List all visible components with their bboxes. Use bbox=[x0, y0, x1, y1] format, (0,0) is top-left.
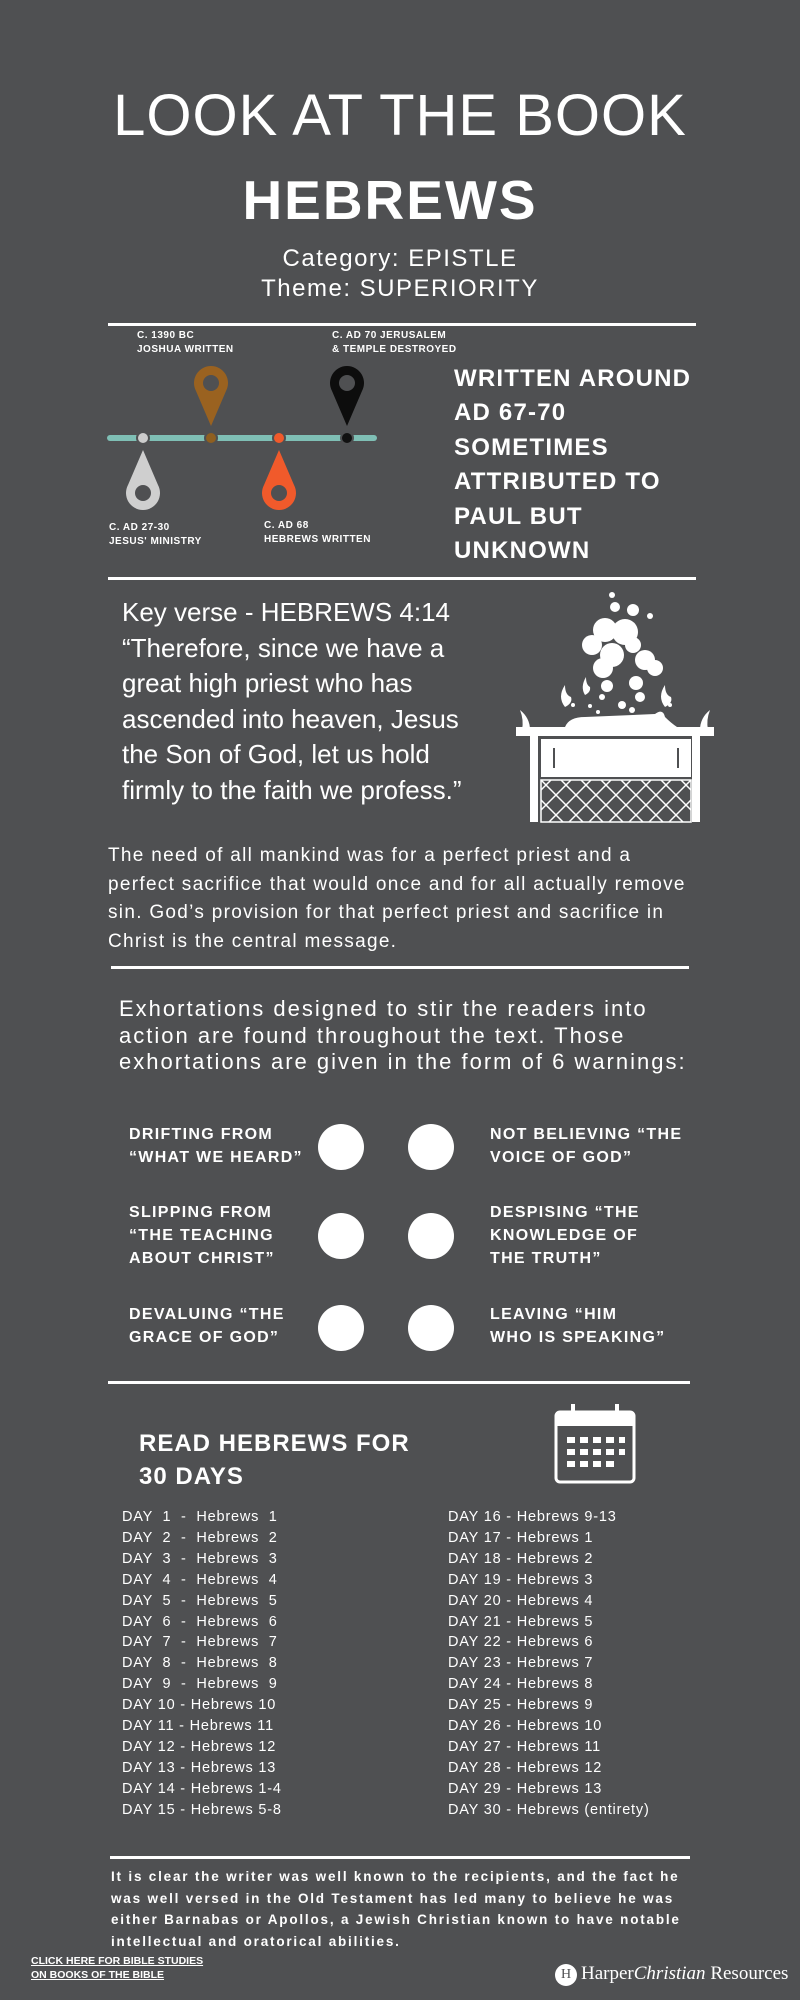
text: JESUS' MINISTRY bbox=[109, 536, 202, 547]
warning 2: VOICE OF GOD” bbox=[490, 1149, 632, 1166]
reading list days 1-15: DAY 13 - Hebrews 13 bbox=[122, 1760, 276, 1776]
key verse bbox=[122, 597, 462, 804]
warning 5 bbox=[129, 1306, 285, 1346]
key verse: ascended into heaven, Jesus bbox=[122, 704, 459, 734]
reading list days 1-15: DAY 6 - Hebrews 6 bbox=[122, 1614, 278, 1630]
reading list days 1-15: DAY 9 - Hebrews 9 bbox=[122, 1676, 278, 1692]
reading list days 16-30: DAY 29 - Hebrews 13 bbox=[448, 1781, 602, 1797]
reading list days 1-15: DAY 12 - Hebrews 12 bbox=[122, 1739, 276, 1755]
timeline labels bbox=[137, 330, 234, 355]
reading list days 1-15: DAY 2 - Hebrews 2 bbox=[122, 1530, 278, 1546]
category and theme: Category: EPISTLE bbox=[283, 245, 517, 272]
reading list days 1-15: DAY 3 - Hebrews 3 bbox=[122, 1551, 278, 1567]
key verse: “Therefore, since we have a bbox=[122, 632, 444, 662]
central message paragraph: perfect sacrifice that would once and for all actually remove bbox=[108, 874, 686, 894]
reading list days 16-30: DAY 16 - Hebrews 9-13 bbox=[448, 1509, 617, 1525]
pin: hebrews written bbox=[262, 450, 296, 510]
pin: jerusalem bbox=[330, 366, 364, 426]
reading list days 16-30: DAY 26 - Hebrews 10 bbox=[448, 1718, 602, 1734]
text: C. AD 68 bbox=[264, 520, 309, 531]
reading list days 16-30: DAY 28 - Hebrews 12 bbox=[448, 1760, 602, 1776]
authorship note bbox=[111, 1869, 681, 1949]
reading list days 1-15: DAY 1 - Hebrews 1 bbox=[122, 1509, 278, 1525]
logo: H bbox=[561, 1967, 571, 1982]
central message paragraph: Christ is the central message. bbox=[108, 930, 397, 952]
text: C. AD 70 JERUSALEM bbox=[332, 330, 446, 341]
warning 3: SLIPPING FROM bbox=[129, 1204, 272, 1221]
timeline labels: C. 1390 BC bbox=[137, 330, 194, 341]
reading list days 1-15: DAY 15 - Hebrews 5-8 bbox=[122, 1802, 282, 1818]
reading list days 1-15: DAY 11 - Hebrews 11 bbox=[122, 1718, 274, 1734]
reading list days 1-15: DAY 10 - Hebrews 10 bbox=[122, 1697, 276, 1713]
reading list days 16-30: DAY 22 - Hebrews 6 bbox=[448, 1634, 593, 1650]
warnings grid bbox=[129, 1124, 682, 1351]
key verse: Key verse - HEBREWS 4:14 bbox=[122, 597, 450, 627]
reading list days 16-30: DAY 27 - Hebrews 11 bbox=[448, 1739, 601, 1755]
icon: altar bbox=[516, 592, 714, 823]
reading list days 1-15: DAY 4 - Hebrews 4 bbox=[122, 1572, 278, 1588]
warning 3: ABOUT CHRIST” bbox=[129, 1250, 275, 1267]
authorship note: intellectual and oratorical abilities. bbox=[111, 1934, 401, 1949]
footer link: CLICK HERE FOR BIBLE STUDIES bbox=[31, 1955, 203, 1967]
reading list days 16-30: DAY 21 - Hebrews 5 bbox=[448, 1614, 593, 1630]
reading list days 1-15: DAY 14 - Hebrews 1-4 bbox=[122, 1781, 282, 1797]
category and theme: Theme: SUPERIORITY bbox=[261, 275, 539, 302]
reading plan heading: 30 DAYS bbox=[139, 1463, 244, 1490]
exhortations intro: exhortations are given in the form of 6 warnings: bbox=[119, 1049, 687, 1074]
text: & TEMPLE DESTROYED bbox=[332, 344, 457, 355]
footer link: ON BOOKS OF THE BIBLE bbox=[31, 1969, 164, 1981]
text: C. AD 27-30 bbox=[109, 522, 170, 533]
key verse: great high priest who has bbox=[122, 668, 413, 698]
exhortations intro: action are found throughout the text. Those bbox=[119, 1022, 625, 1048]
warning 3 bbox=[129, 1204, 275, 1267]
reading list days 16-30 bbox=[448, 1509, 650, 1818]
date summary: PAUL BUT bbox=[454, 503, 583, 530]
exhortations intro bbox=[119, 996, 687, 1074]
warning 4: KNOWLEDGE OF bbox=[490, 1227, 638, 1244]
text: HEBREWS WRITTEN bbox=[264, 534, 371, 545]
central message paragraph: The need of all mankind was for a perfect priest and a bbox=[108, 845, 631, 866]
category and theme bbox=[261, 245, 539, 302]
warning 1 bbox=[129, 1126, 303, 1166]
central message paragraph: sin. God’s provision for that perfect priest and sacrifice in bbox=[108, 902, 664, 923]
icon: calendar bbox=[554, 1404, 636, 1484]
reading list days 1-15: DAY 5 - Hebrews 5 bbox=[122, 1593, 278, 1609]
reading list days 16-30: DAY 20 - Hebrews 4 bbox=[448, 1593, 593, 1609]
reading list days 1-15: DAY 8 - Hebrews 8 bbox=[122, 1655, 278, 1671]
pin: joshua bbox=[194, 366, 228, 426]
date summary: AD 67-70 bbox=[454, 399, 566, 426]
book name: HEBREWS bbox=[242, 169, 538, 231]
reading list days 16-30: DAY 24 - Hebrews 8 bbox=[448, 1676, 593, 1692]
warning 6 bbox=[490, 1306, 665, 1346]
warning 2: NOT BELIEVING “THE bbox=[490, 1126, 682, 1143]
reading list days 1-15 bbox=[122, 1509, 282, 1818]
warning 2 bbox=[490, 1126, 682, 1166]
reading list days 16-30: DAY 19 - Hebrews 3 bbox=[448, 1572, 593, 1588]
reading plan heading: READ HEBREWS FOR bbox=[139, 1430, 410, 1457]
reading list days 16-30: DAY 18 - Hebrews 2 bbox=[448, 1551, 593, 1567]
reading list days 16-30: DAY 17 - Hebrews 1 bbox=[448, 1530, 593, 1546]
warning 1: “WHAT WE HEARD” bbox=[129, 1149, 303, 1166]
exhortations intro: Exhortations designed to stir the readers into bbox=[119, 996, 648, 1021]
timeline labels: JOSHUA WRITTEN bbox=[137, 344, 234, 355]
key verse: firmly to the faith we profess.” bbox=[122, 774, 462, 804]
authorship note: either Barnabas or Apollos, a Jewish Christian known to have notable bbox=[111, 1912, 681, 1927]
date summary: UNKNOWN bbox=[454, 537, 590, 564]
reading plan heading bbox=[139, 1430, 410, 1490]
date summary: SOMETIMES bbox=[454, 434, 609, 461]
warning 5: GRACE OF GOD” bbox=[129, 1329, 279, 1346]
date summary bbox=[454, 365, 691, 564]
pin: jesus ministry bbox=[126, 450, 160, 510]
reading list days 16-30: DAY 30 - Hebrews (entirety) bbox=[448, 1802, 650, 1818]
title: LOOK AT THE BOOK bbox=[113, 83, 687, 148]
date summary: WRITTEN AROUND bbox=[454, 365, 691, 392]
footer link bbox=[31, 1955, 204, 1981]
reading list days 16-30: DAY 23 - Hebrews 7 bbox=[448, 1655, 593, 1671]
authorship note: was well versed in the Old Testament has led many to believe he was bbox=[111, 1891, 674, 1906]
warning 4 bbox=[490, 1204, 640, 1267]
reading list days 16-30: DAY 25 - Hebrews 9 bbox=[448, 1697, 593, 1713]
warning 4: THE TRUTH” bbox=[490, 1250, 602, 1267]
central message paragraph bbox=[108, 845, 686, 952]
logo: HarperChristian Resources bbox=[581, 1963, 788, 1984]
date summary: ATTRIBUTED TO bbox=[454, 468, 661, 495]
key verse: the Son of God, let us hold bbox=[122, 739, 430, 769]
warning 6: LEAVING “HIM bbox=[490, 1306, 617, 1323]
authorship note: It is clear the writer was well known to the recipients, and the fact he bbox=[111, 1869, 679, 1884]
warning 5: DEVALUING “THE bbox=[129, 1306, 285, 1323]
warning 4: DESPISING “THE bbox=[490, 1204, 640, 1221]
warning 3: “THE TEACHING bbox=[129, 1227, 274, 1244]
timeline bbox=[107, 366, 377, 510]
reading list days 1-15: DAY 7 - Hebrews 7 bbox=[122, 1634, 278, 1650]
warning 6: WHO IS SPEAKING” bbox=[490, 1329, 665, 1346]
warning 1: DRIFTING FROM bbox=[129, 1126, 273, 1143]
